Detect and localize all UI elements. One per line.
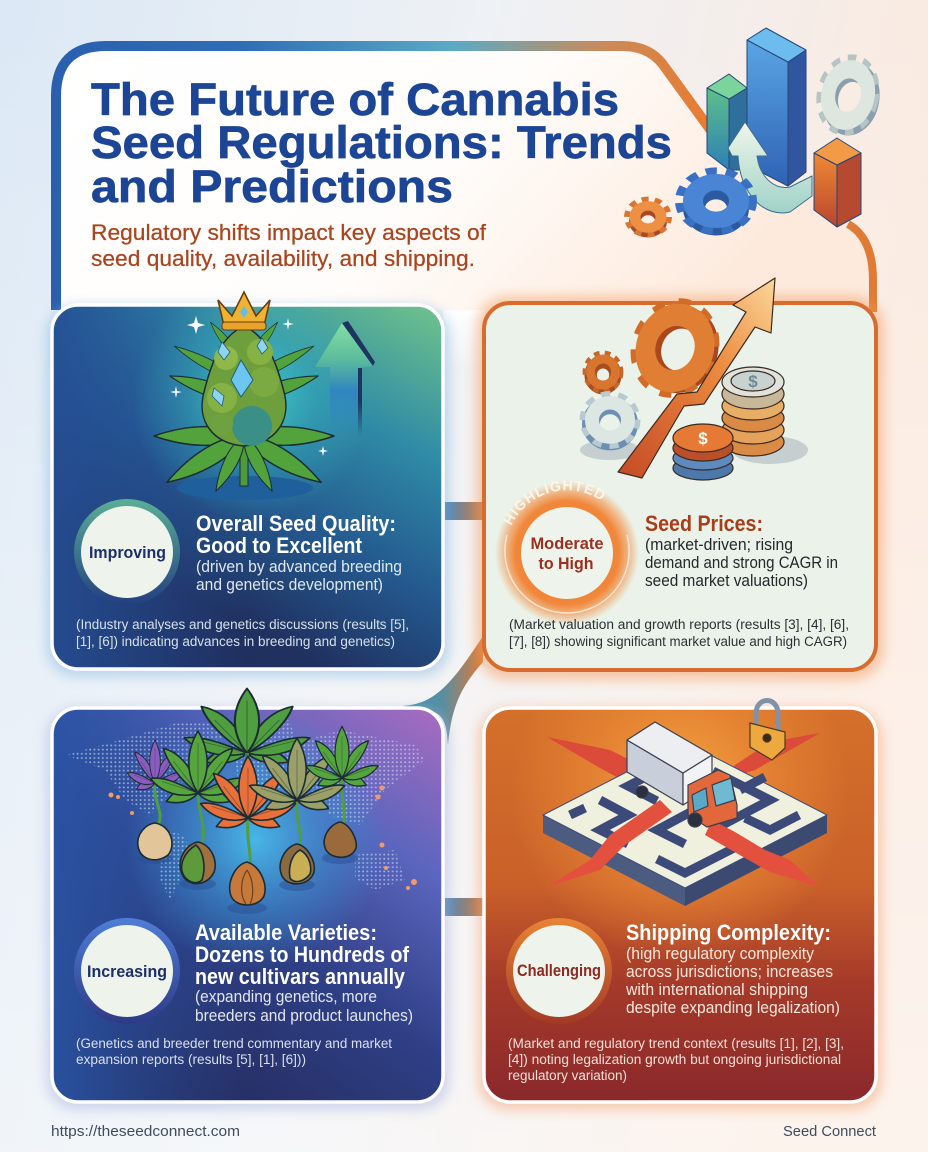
description xyxy=(195,987,413,1025)
heading: Good to Excellent xyxy=(196,533,362,558)
icon: maze with truck and padlock xyxy=(543,700,827,906)
padlock xyxy=(750,700,785,760)
icon: gears, rising arrow and coins xyxy=(580,278,808,480)
badge: improving xyxy=(74,499,180,605)
subtitle: Regulatory shifts impact key aspects of xyxy=(91,220,487,245)
badge: moderate to high: to High xyxy=(538,554,594,573)
red ribbon lower left xyxy=(547,800,672,887)
badge: moderate to high xyxy=(496,480,638,624)
heading: new cultivars annually xyxy=(195,964,405,989)
description xyxy=(645,535,838,590)
subtitle: seed quality, availability, and shipping. xyxy=(91,246,475,271)
icon: cannabis bud with crown xyxy=(154,292,334,500)
icon: small orange gear xyxy=(627,199,669,235)
source note: (Industry analyses and genetics discussions (results [5], xyxy=(76,617,409,633)
big coin stack xyxy=(722,367,784,456)
heading: Overall Seed Quality: xyxy=(196,511,396,536)
description xyxy=(625,944,840,1017)
title xyxy=(91,74,672,212)
panel: shipping complexity xyxy=(471,698,888,1117)
badge: increasing: Increasing xyxy=(87,962,167,981)
crown xyxy=(218,292,270,326)
panel: seed prices xyxy=(468,277,891,688)
icon: sprouting seeds xyxy=(137,778,358,914)
heading: Available Varieties: xyxy=(195,920,377,945)
heading xyxy=(195,920,409,989)
footer url: https://theseedconnect.com xyxy=(51,1124,240,1140)
curved arrow xyxy=(728,122,812,213)
badge: moderate to high: Moderate xyxy=(530,534,604,553)
icon: large top leaf xyxy=(184,688,310,771)
source note: (Market valuation and growth reports (results [3], [4], [6], xyxy=(509,617,849,633)
subtitle xyxy=(91,220,487,271)
green bar xyxy=(707,74,747,170)
badge: challenging xyxy=(506,918,612,1024)
icon: grey gear xyxy=(813,53,883,137)
title: and Predictions xyxy=(91,161,453,212)
big coin stack: $ xyxy=(748,372,758,391)
blue bar xyxy=(747,28,806,186)
source note: regulatory variation) xyxy=(508,1068,627,1084)
description: with international shipping xyxy=(625,980,808,999)
maze xyxy=(543,742,827,906)
description: (driven by advanced breeding xyxy=(196,557,402,576)
icon: blue gear xyxy=(680,171,752,231)
description: (expanding genetics, more xyxy=(195,987,377,1006)
big gear xyxy=(623,293,727,403)
grey gear xyxy=(583,394,637,446)
source note: [4]) noting legalization growth but ongoing jurisdictional xyxy=(508,1052,841,1068)
arrow xyxy=(618,278,775,478)
connector bottom xyxy=(445,898,483,916)
red ribbon lower right xyxy=(705,820,820,887)
red ribbon upper left xyxy=(547,737,650,790)
description: demand and strong CAGR in xyxy=(645,553,838,572)
description xyxy=(196,557,402,594)
description: and genetics development) xyxy=(196,575,383,594)
connector top xyxy=(445,502,483,520)
footer brand: Seed Connect xyxy=(783,1124,876,1140)
small gear xyxy=(585,353,621,391)
description: despite expanding legalization) xyxy=(626,998,840,1017)
header frame xyxy=(56,46,873,370)
description: (market-driven; rising xyxy=(645,535,793,554)
small coin stack xyxy=(673,424,733,480)
title: Seed Regulations: Trends xyxy=(91,117,672,168)
orange bar xyxy=(814,138,861,227)
description: across jurisdictions; increases xyxy=(626,962,833,981)
icon: green leaf xyxy=(150,731,246,803)
description: (high regulatory complexity xyxy=(626,944,814,963)
heading: Dozens to Hundreds of xyxy=(195,942,409,967)
title: The Future of Cannabis xyxy=(91,74,619,125)
icon: small green leaf xyxy=(306,726,378,786)
source note: (Genetics and breeder trend commentary and market xyxy=(76,1036,392,1052)
source note: [1], [6]) indicating advances in breeding and genetics) xyxy=(76,634,395,650)
badge: challenging: Challenging xyxy=(517,961,601,980)
panel: available varieties xyxy=(46,688,450,1110)
source note: [7], [8]) showing significant market value and high CAGR) xyxy=(509,634,847,650)
heading: Seed Prices: xyxy=(645,511,763,536)
map location dots xyxy=(108,786,417,890)
connector swoop xyxy=(402,636,483,745)
source note xyxy=(508,1036,844,1084)
source note: (Market and regulatory trend context (results [1], [2], [3], xyxy=(508,1036,844,1052)
icon: orange leaf xyxy=(200,756,296,828)
badge: moderate to high: HIGHLIGHTED xyxy=(504,480,604,525)
source note: expansion reports (results [5], [1], [6])) xyxy=(76,1052,306,1068)
icon: purple leaf xyxy=(127,740,183,790)
icon: header bar chart with gears xyxy=(627,28,883,235)
heading: Shipping Complexity: xyxy=(626,920,831,945)
source note xyxy=(76,617,409,650)
source note xyxy=(509,617,849,650)
badge: improving: Improving xyxy=(89,543,166,562)
heading xyxy=(196,511,396,558)
small coin stack: $ xyxy=(698,429,708,448)
source note xyxy=(76,1036,392,1068)
icon: growth arrow xyxy=(315,321,375,436)
description: breeders and product launches) xyxy=(195,1006,413,1025)
icon: variegated leaf xyxy=(249,738,345,810)
panel: seed quality xyxy=(46,280,450,677)
red ribbon upper right xyxy=(725,733,820,780)
truck xyxy=(627,722,737,827)
badge: increasing xyxy=(74,918,180,1024)
description: seed market valuations) xyxy=(645,571,808,590)
dotted world map xyxy=(66,720,425,900)
